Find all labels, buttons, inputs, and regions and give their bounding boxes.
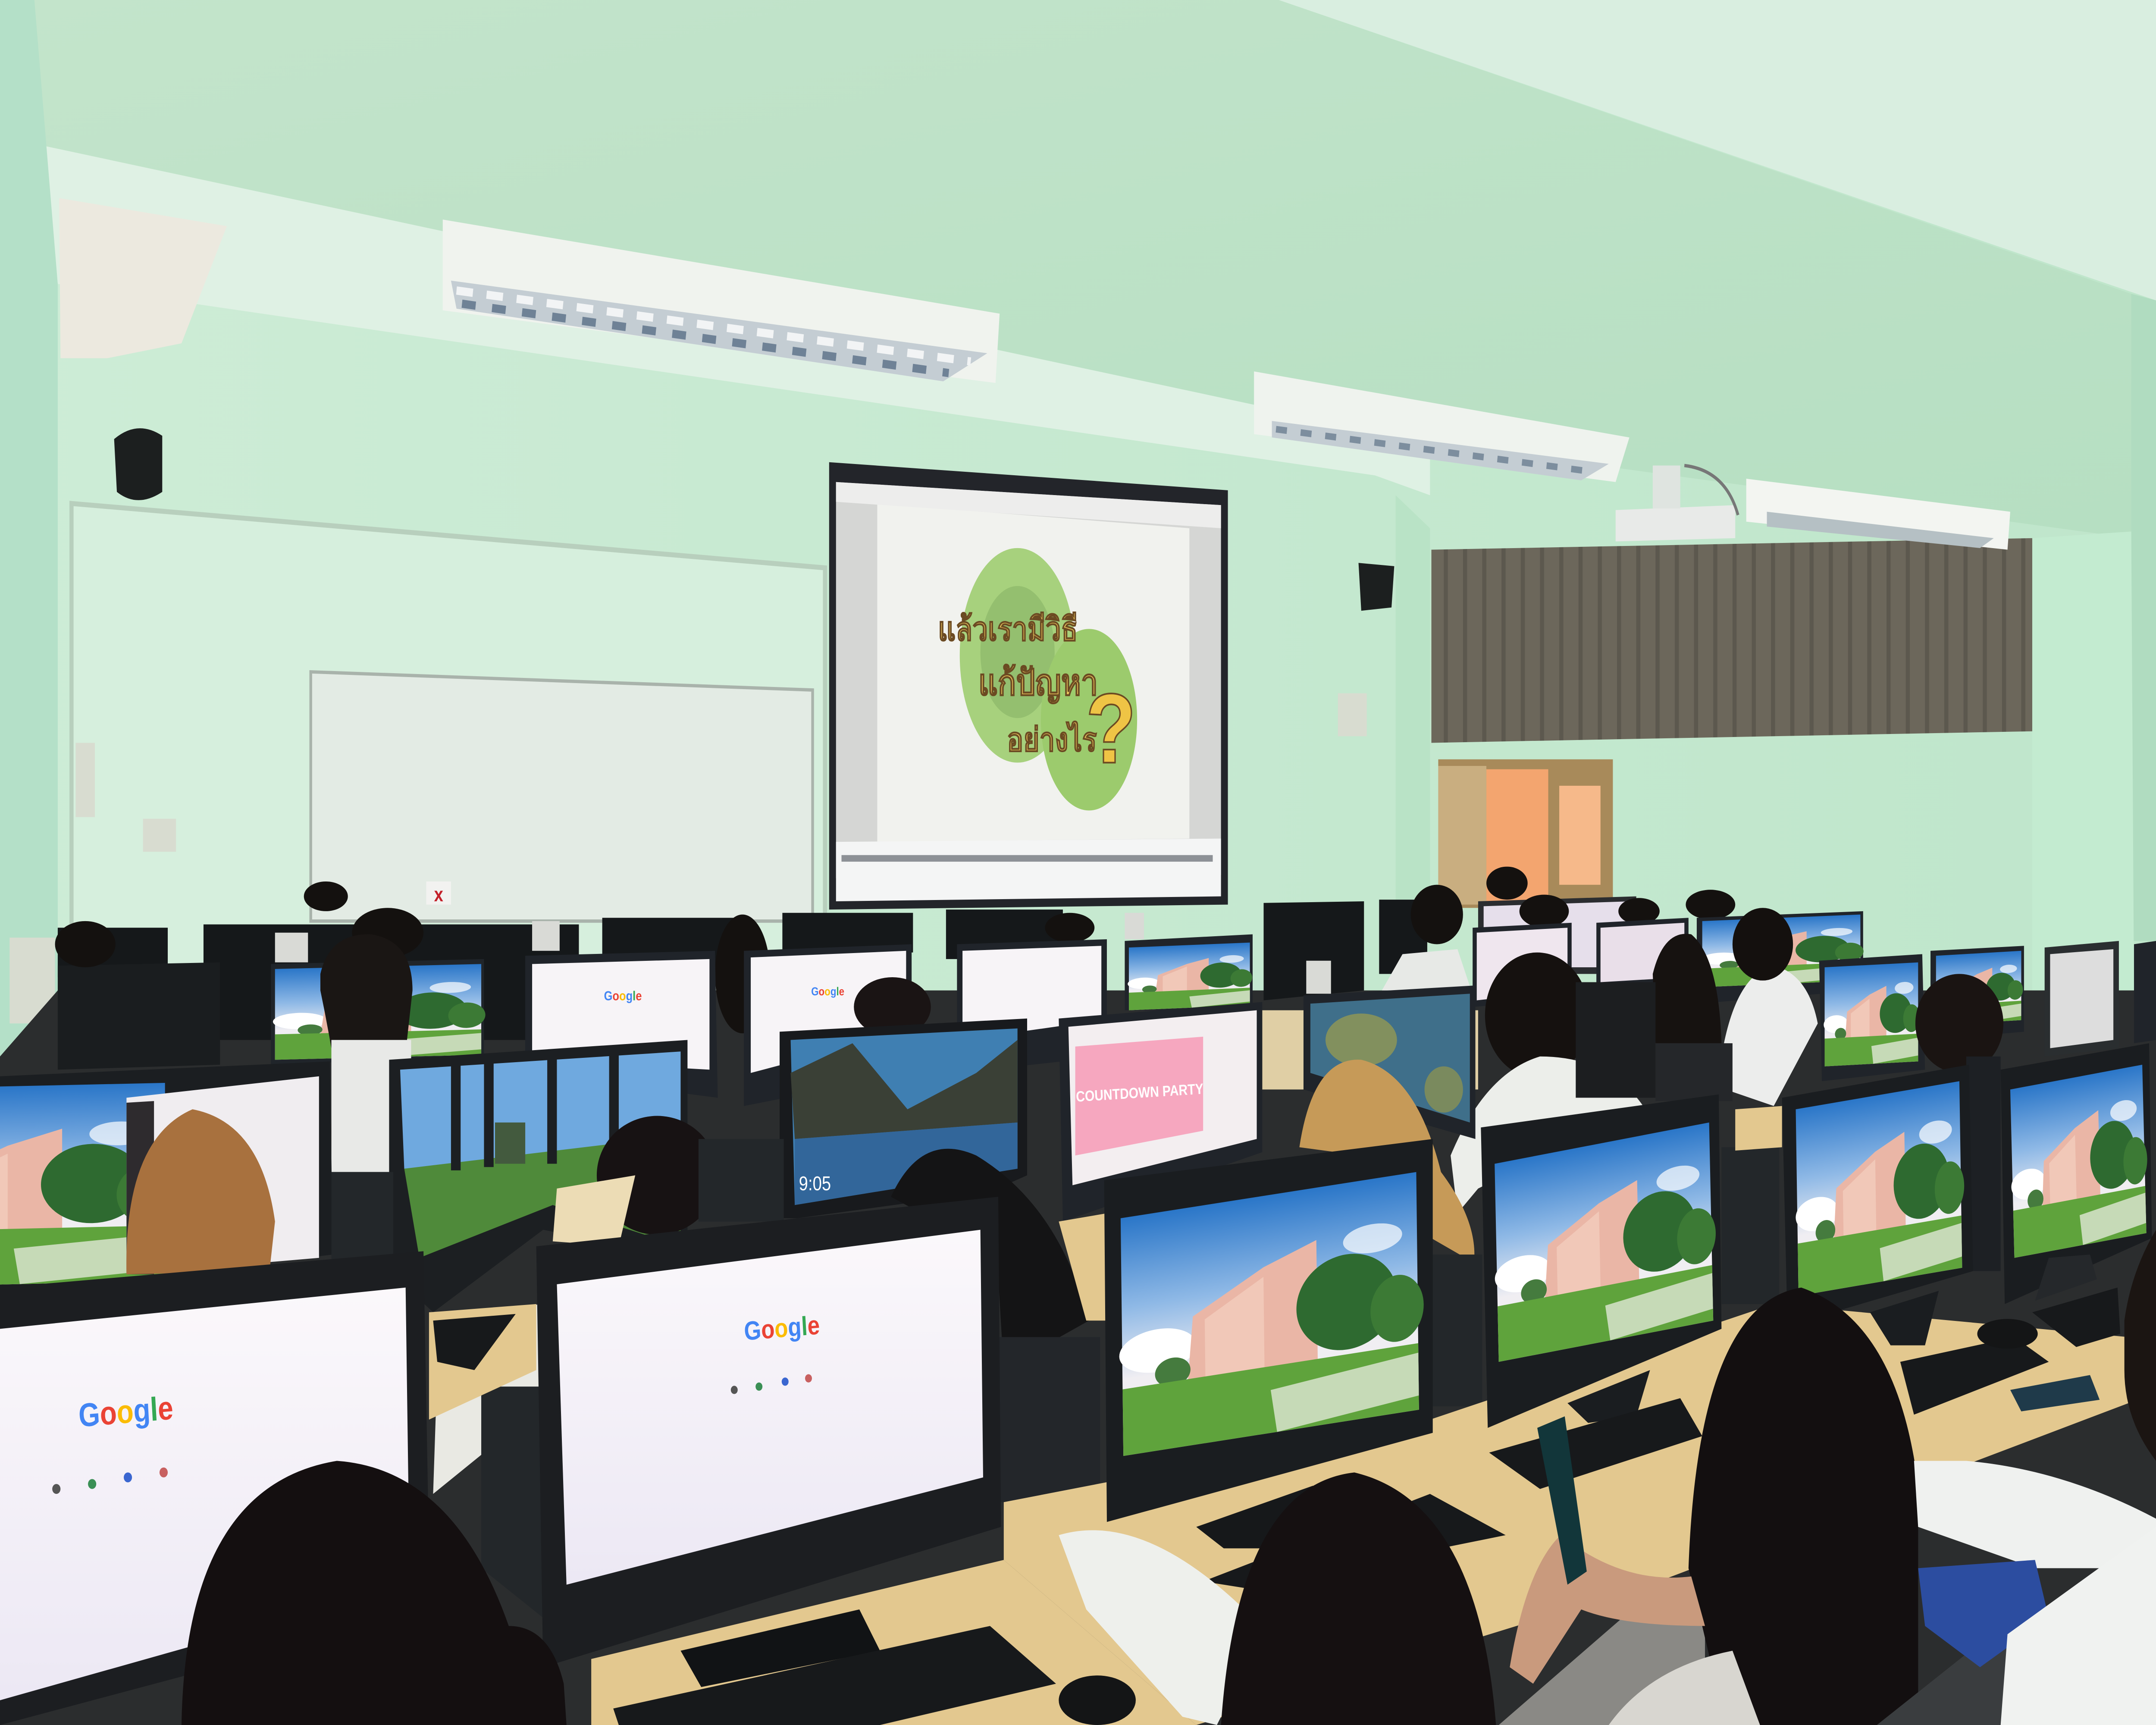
- ceiling light 1: [443, 220, 1000, 383]
- screen slogan graphic: อย่างไร: [1007, 720, 1097, 758]
- wall controls: [9, 693, 1367, 1023]
- ceiling light 2: [1254, 371, 1630, 482]
- screen slogan graphic: [938, 548, 1137, 810]
- media player bar: [842, 855, 1213, 862]
- student foreground right: [1510, 1288, 1918, 1725]
- ceiling projector: [1616, 465, 1738, 542]
- right wall column: [2131, 294, 2156, 941]
- red X marker: [426, 881, 451, 906]
- monitor: google left: Google: [78, 1389, 174, 1434]
- second mouse: [1977, 1319, 2038, 1349]
- monitor: fifth front: [1782, 1065, 1973, 1346]
- window blinds: [1432, 538, 2032, 743]
- chairs: [331, 1139, 1779, 1618]
- ceiling: [1279, 0, 2156, 301]
- monitor: google center: Google: [743, 1310, 821, 1346]
- classroom floor: [1499, 1585, 1705, 1725]
- screen slogan graphic: แล้วเรามีวิธี: [938, 611, 1078, 647]
- monitor: fourth front: [1481, 1095, 1721, 1428]
- monitor: google center: [536, 1197, 1001, 1687]
- mid screen row: Google: [604, 988, 642, 1003]
- student foreground left: [182, 1461, 567, 1725]
- desks: [429, 1106, 2128, 1725]
- right chair: [1877, 1634, 2021, 1725]
- wall panel: [72, 503, 825, 991]
- room lower area: [0, 991, 2156, 1725]
- seated student center left: [433, 1116, 1100, 1502]
- red X marker: x: [434, 884, 443, 906]
- beam underside: [41, 145, 1430, 495]
- white cards on monitors: [275, 913, 1331, 1030]
- person with blonde hair: [1299, 1060, 1474, 1263]
- door: [1438, 759, 1613, 908]
- left wall: [0, 0, 58, 1057]
- ceiling beam: [34, 0, 2131, 538]
- back row monitors: [58, 896, 1636, 1070]
- monitor: far right: [2001, 1043, 2152, 1304]
- student foreground center: [1221, 1472, 1496, 1725]
- white shirt on desk: [1059, 1530, 1254, 1725]
- side alcove wall: [1396, 495, 1430, 925]
- monitor: tall grass wallpaper: [389, 1040, 687, 1312]
- monitor: pink countdown video: COUNTDOWN PARTY: [1075, 1080, 1204, 1105]
- person with red highlighted hair: [126, 1109, 275, 1274]
- projector screen: [829, 462, 1228, 910]
- keyboards: [433, 1288, 2120, 1725]
- right arm and shirts: [1914, 1230, 2156, 1725]
- mid screen row: [271, 911, 2156, 1106]
- shirt back person: [1382, 949, 1471, 991]
- phone on desk: [2010, 1375, 2100, 1411]
- whiteboard: [311, 672, 813, 921]
- screen slogan graphic: ?: [1086, 673, 1136, 784]
- ceiling light 3: [1746, 479, 2010, 550]
- monitor: map: [1304, 985, 1476, 1139]
- speaker right: [1359, 563, 1394, 611]
- monitor: third front: [1104, 1139, 1433, 1548]
- monitor: lake wallpaper: 9:05: [799, 1173, 831, 1195]
- monitor: google left: [0, 1251, 430, 1725]
- mid row people: [320, 908, 2003, 1271]
- computer mouse: [1059, 1675, 1136, 1725]
- mid screen row: Google: [811, 985, 844, 998]
- smartphone: [1537, 1416, 1587, 1585]
- monitor: left wallpaper and window: [0, 1061, 333, 1296]
- far desks: [1262, 1010, 1478, 1089]
- monitor: pink countdown video: [1059, 1002, 1262, 1222]
- speaker left: [114, 428, 162, 500]
- monitor: lake wallpaper: [780, 1019, 1027, 1218]
- back row people: [55, 867, 1735, 1033]
- screen slogan graphic: แก้ปัญหา: [978, 663, 1098, 704]
- air conditioner vent: [59, 198, 227, 358]
